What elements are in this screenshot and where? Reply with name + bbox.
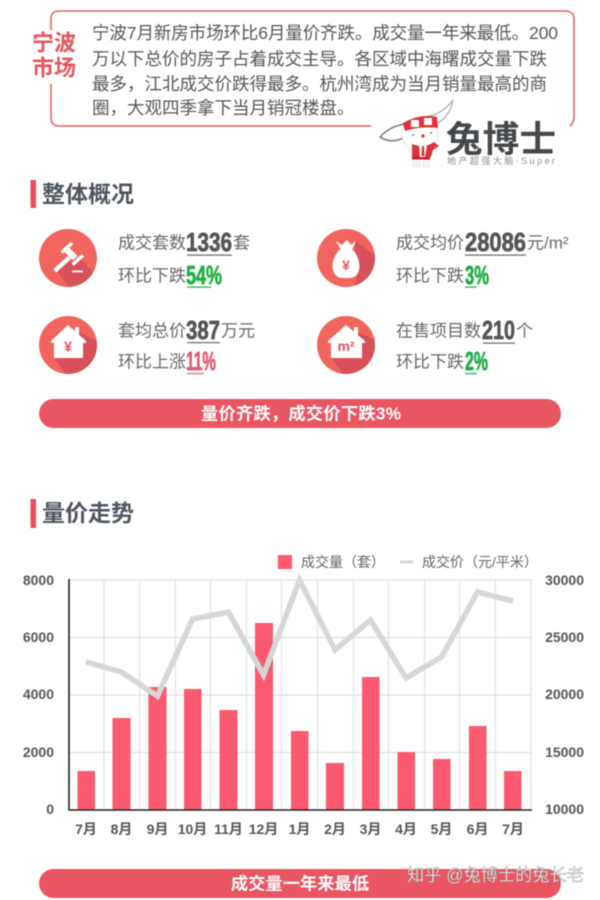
stat text: 环比下跌 (118, 266, 186, 286)
stat text: 环比下跌 (396, 352, 464, 372)
stat text: 万元 (221, 322, 255, 340)
chart legend (278, 554, 538, 570)
icon: money bag (316, 228, 376, 288)
icon: house with m2 (316, 315, 376, 375)
stat text (118, 227, 250, 290)
right axis labels: 10000 (545, 801, 584, 817)
heading: 量价走势: 量价走势 (42, 500, 134, 526)
icon: money bag: ¥ (342, 257, 350, 273)
right axis labels: 30000 (545, 572, 584, 588)
logo tagline: 地产超强大脑·Super (447, 155, 555, 166)
right axis labels: 15000 (545, 744, 584, 760)
watermark: 知乎 @兔博士的兔长老 (407, 865, 584, 885)
line: price (86, 580, 513, 696)
stat: 成交套数 (38, 228, 250, 288)
month labels: 8月 (111, 821, 132, 837)
intro text (92, 23, 558, 118)
icon: house with yen: ¥ (64, 338, 73, 356)
stat text: 个 (516, 322, 533, 340)
intro text: 最多，江北成交价跌得最多。杭州湾成为当月销量最高的商 (92, 74, 547, 94)
month labels: 7月 (75, 821, 97, 837)
month labels: 2月 (324, 821, 346, 837)
month labels: 5月 (431, 821, 452, 837)
label: 宁波市场: 宁波 (32, 30, 76, 56)
stat text: 210 (482, 315, 515, 345)
left axis labels: 0 (46, 801, 54, 817)
month labels: 3月 (360, 821, 381, 837)
left axis labels: 6000 (23, 629, 54, 645)
stat text: 11% (186, 346, 216, 376)
month labels (75, 821, 524, 837)
left axis labels: 8000 (23, 572, 54, 588)
heading: 整体概况: 整体概况 (42, 181, 134, 207)
stat text: 套 (233, 234, 250, 252)
intro text: 宁波7月新房市场环比6月量价齐跌。成交量一年来最低。200 (92, 23, 558, 43)
chart legend: 成交价（元/平米） (422, 554, 538, 570)
stat text (118, 315, 255, 376)
intro text: 圈，大观四季拿下当月销冠楼盘。 (92, 98, 354, 118)
chart: volume and price trend (23, 554, 584, 837)
month labels: 10月 (178, 821, 207, 837)
stat text: 3% (465, 260, 489, 290)
right axis labels: 25000 (545, 629, 584, 645)
left axis labels: 2000 (23, 744, 54, 760)
left axis labels: 4000 (23, 686, 54, 702)
stat: 在售项目数 (317, 315, 533, 380)
label: 宁波市场 (32, 30, 76, 80)
banner: 量价齐跌: 量价齐跌，成交价下跌3% (201, 404, 401, 424)
icon: house with m2: m² (337, 338, 355, 354)
banner: 量价齐跌 (39, 399, 561, 428)
month labels: 1月 (289, 821, 310, 837)
logo wordmark: 兔博士 (446, 118, 556, 160)
stat text: 环比下跌 (396, 266, 464, 286)
intro text: 万以下总价的房子占着成交主导。各区域中海曙成交量下跌 (92, 49, 547, 69)
stat text: 28086 (465, 227, 526, 257)
month labels: 12月 (249, 821, 278, 837)
logo: 兔博士 (380, 100, 556, 167)
stat text: 元/m² (527, 234, 569, 252)
month labels: 6月 (467, 821, 488, 837)
icon: rabbit mascot (380, 100, 453, 167)
right axis labels (545, 572, 584, 817)
stat text: 套均总价 (118, 322, 186, 340)
stat text: 成交套数 (118, 234, 186, 252)
stat text (396, 315, 533, 376)
stat text: 1336 (186, 227, 232, 257)
left axis labels (23, 572, 54, 817)
month labels: 9月 (147, 821, 168, 837)
stat text: 环比上涨 (118, 352, 186, 372)
banner: 成交量一年来最低 (39, 869, 561, 898)
icon: house with yen (39, 316, 100, 380)
stat: 成交均价 (316, 228, 569, 288)
stat text (396, 227, 569, 290)
stat text: 54% (186, 260, 222, 290)
banner: 成交量一年来最低: 成交量一年来最低 (231, 874, 369, 894)
icon: gavel (38, 228, 98, 288)
chart legend: 成交量（套） (301, 554, 385, 570)
stat text: 2% (465, 346, 488, 376)
panel: intro callout (32, 11, 574, 126)
chart axes (69, 579, 532, 810)
label: 宁波市场: 市场 (32, 56, 76, 80)
bars: volume (78, 623, 522, 810)
month labels: 7月 (502, 821, 524, 837)
month labels: 4月 (395, 821, 417, 837)
stat text: 成交均价 (396, 234, 464, 252)
stat text: 在售项目数 (396, 322, 481, 340)
month labels: 11月 (214, 821, 243, 837)
stat text: 387 (186, 315, 220, 345)
right axis labels: 20000 (545, 686, 584, 702)
stat: 套均总价 (39, 315, 255, 380)
callout outline (51, 11, 574, 126)
